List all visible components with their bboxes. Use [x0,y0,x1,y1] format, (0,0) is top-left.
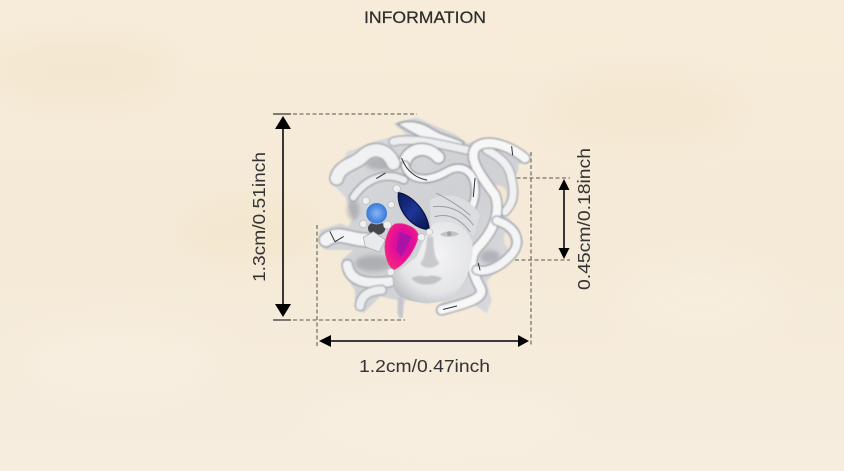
dark engraving marks [330,147,513,309]
eye [440,231,459,237]
lips [411,276,442,285]
shaded hollows [347,157,500,271]
prongs and small beads [360,185,433,276]
label: height: 1.3cm/0.51inch [249,152,269,282]
nose [420,237,439,268]
snake: crossing loop [405,165,475,215]
face [392,222,473,303]
snake: left head [337,150,393,178]
snake: knot [405,149,438,162]
snake: main loop [442,143,525,310]
snake: tail drop [394,299,407,316]
snake: upper-left strand [353,176,404,197]
gem: clear stone [363,232,385,252]
snake: top head [393,121,467,150]
gem: sapphire marquise [398,193,429,229]
dashed guide lines [293,114,570,347]
gem: ruby pear [385,224,418,270]
snake coils [326,121,525,316]
pendant: Medusa head [318,117,530,318]
height dimension arrow [273,114,291,320]
bail height dimension arrow [558,179,570,259]
dark setting [368,222,385,235]
snake: left crossing [326,236,367,240]
snake: right strand [487,150,513,212]
snake: right coil [477,221,517,271]
openings between coils [492,185,511,249]
label: bail height: 0.45cm/0.18inch [574,148,594,290]
label: width: 1.2cm/0.47inch [359,356,490,376]
title: INFORMATION [364,9,486,27]
silhouette [318,117,530,318]
gem: blue topaz [366,203,387,224]
width dimension arrow [319,335,529,347]
snake: bottom-left head [360,290,382,306]
snake: lower-left [347,265,390,283]
forehead hair strands [430,195,480,237]
